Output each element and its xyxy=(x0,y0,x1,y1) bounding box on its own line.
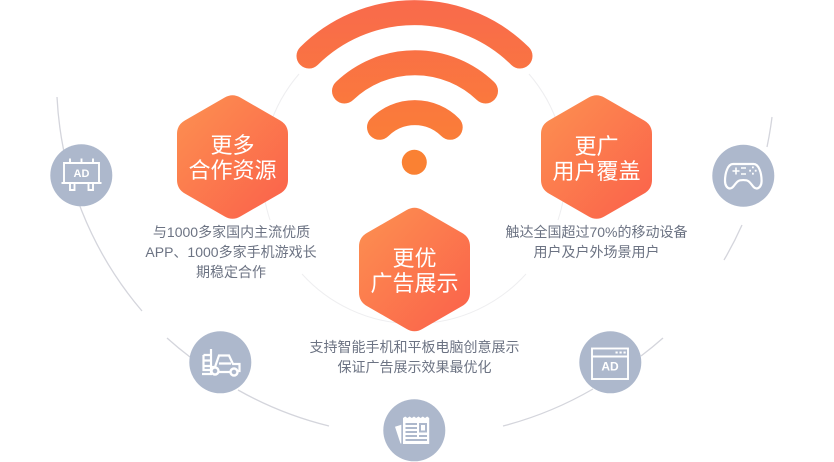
inner ring arcs xyxy=(262,74,566,324)
icon: newspaper xyxy=(383,399,445,461)
icon: browser ad: AD xyxy=(601,360,619,374)
hexagon: better ad display xyxy=(359,208,470,331)
text block: partner description: APP、1000多家手机游戏长 xyxy=(145,244,317,260)
icon: billboard: AD xyxy=(74,168,89,180)
panel: better ad display xyxy=(310,208,520,375)
heading: more partner resources: 合作资源 xyxy=(188,158,277,183)
heading: better ad display: 广告展示 xyxy=(370,271,459,296)
icon: billboard xyxy=(50,144,112,206)
hexagon: more partner resources xyxy=(177,95,288,219)
text block: coverage description: 用户及户外场景用户 xyxy=(534,244,660,260)
icon: forklift xyxy=(189,331,251,393)
icon: browser ad xyxy=(579,331,641,393)
heading: better ad display: 更优 xyxy=(392,246,437,271)
icon: game controller xyxy=(712,145,774,207)
text block: partner description: 与1000多家国内主流优质 xyxy=(153,224,310,240)
text block: display description: 支持智能手机和平板电脑创意展示 xyxy=(310,339,520,355)
text block: partner description: 期稳定合作 xyxy=(196,264,266,280)
heading: wider user coverage: 用户覆盖 xyxy=(552,159,641,184)
outer ring arcs xyxy=(57,97,772,426)
heading: wider user coverage: 更广 xyxy=(574,134,619,159)
text block: display description: 保证广告展示效果最优化 xyxy=(338,359,492,375)
text block: coverage description: 触达全国超过70%的移动设备 xyxy=(505,224,688,240)
hexagon: wider user coverage xyxy=(541,95,652,219)
panel: more partner resources xyxy=(145,95,317,280)
icon: wifi signal xyxy=(309,13,520,175)
panel: wider user coverage xyxy=(505,95,688,260)
heading: more partner resources: 更多 xyxy=(210,133,255,158)
